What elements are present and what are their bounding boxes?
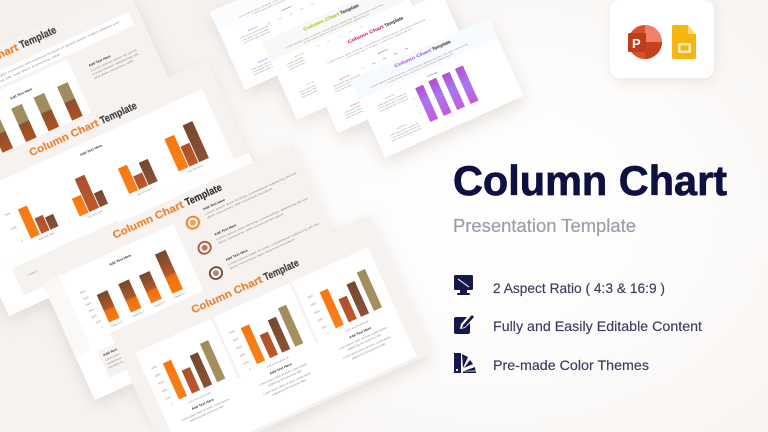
purple column chart: 200 bbox=[419, 112, 422, 114]
chart card 3: 3000 bbox=[313, 309, 321, 315]
slide D title: Template bbox=[262, 257, 301, 283]
purple slide title: Template bbox=[431, 39, 452, 52]
slide: green theme template: Lorem ipsum dolor sit amet, consectetuer adipiscing elit bbox=[303, 12, 371, 44]
slide B: clustered columns: Add Text Here bbox=[38, 231, 55, 241]
slide C: stacked orange columns with icon list: Category 1 bbox=[110, 319, 124, 328]
slide: green theme template: Column Chart bbox=[302, 11, 341, 32]
feature: color themes bbox=[454, 353, 649, 373]
blue category labels: Cate bbox=[267, 21, 271, 26]
chart card 3: ● A1 ● A2 ● A3 ● A4 bbox=[345, 319, 369, 333]
purple side text bottom: Lorem ipsum dolor sit amet elit bbox=[390, 124, 421, 140]
slide C: stacked orange columns with icon list: 2000 bbox=[90, 313, 98, 319]
slide D title bbox=[190, 257, 301, 316]
blue category labels: Cate bbox=[299, 7, 304, 11]
slide: green theme template: Lorem ipsum dolor sit amet elit bbox=[288, 56, 317, 71]
purple side text top: Lorem ipsum dolor sit amet elit bbox=[379, 97, 410, 113]
pink category labels: Cate bbox=[393, 52, 398, 56]
purple side text bottom: Add Text Here bbox=[396, 123, 407, 130]
slide: purple theme template: Add Text Here bbox=[427, 71, 438, 78]
green category labels: Cate bbox=[326, 39, 331, 43]
slide B: clustered columns: Add Text Here bbox=[136, 186, 154, 197]
icon list: diem nonummy nibh euismod tincidunt bbox=[206, 187, 273, 220]
icon list: Lorem ipsum dolor sit amet, consectetuer adipiscing elit sed bbox=[216, 196, 309, 241]
purple slide title bbox=[393, 39, 452, 69]
slide: pink theme template: Add Text Here bbox=[349, 100, 360, 108]
slide A: stacked olive columns: consectetuer adipiscing elit bbox=[92, 52, 139, 76]
chart card 2: 2000 bbox=[239, 352, 246, 358]
chart card 1: 2000 bbox=[161, 387, 168, 393]
purple side text top: Add Text Here bbox=[384, 93, 395, 100]
slide: blue theme template: Lorem ipsum dolor sit amet elit bbox=[241, 27, 270, 42]
feature: editable: Fully and Easily Editable Content bbox=[493, 318, 702, 334]
slide C: stacked orange columns with icon list: 0 bbox=[101, 325, 104, 329]
slide: blue theme template: Lorem ipsum dolor sit amet elit bbox=[242, 30, 271, 45]
chart card 2: ● A1 ● A2 ● A3 ● A4 bbox=[266, 355, 290, 369]
chart card 1: 1000 bbox=[164, 395, 172, 401]
green category labels: Cate bbox=[359, 25, 364, 29]
chart card 2: 3000 bbox=[235, 344, 243, 350]
chart card 2: 0 bbox=[249, 367, 252, 371]
slide: pink theme template: Lorem ipsum dolor sit amet elit bbox=[343, 100, 372, 115]
shadows behind slides bbox=[0, 0, 525, 430]
blue category labels bbox=[267, 2, 315, 26]
slide C: stacked orange columns with icon list: 3000 bbox=[85, 301, 92, 307]
pink category labels bbox=[361, 47, 409, 70]
slide: pink theme template: Lorem ipsum dolor sit amet elit bbox=[344, 102, 373, 117]
chart card 3: 2000 bbox=[317, 316, 324, 322]
slide: blue theme template: Lorem ipsum dolor sit amet elit bbox=[251, 56, 280, 71]
slide C: stacked orange columns with icon list: Column Chart bbox=[111, 199, 186, 241]
pink category labels: Cate bbox=[361, 66, 365, 70]
purple side text top: Lorem ipsum dolor sit amet elit bbox=[377, 92, 407, 108]
feature: editable bbox=[454, 315, 702, 334]
chart card 1: 5000 bbox=[151, 364, 158, 370]
blue category labels: Cate bbox=[289, 12, 293, 16]
chart card 1: ● A1 ● A2 ● A3 ● A4 bbox=[188, 390, 212, 404]
slide B: clustered columns: 2000 bbox=[10, 225, 18, 231]
feature: aspect ratio bbox=[454, 275, 665, 296]
purple column chart: 500 bbox=[413, 98, 416, 101]
icon list: Add Text Here bbox=[202, 198, 226, 211]
slide B: clustered columns: Column Chart bbox=[28, 117, 101, 159]
chart card 2: Lorem ipsum dolor sit amet, consectetuer bbox=[263, 371, 312, 396]
slide: green theme template: Lorem ipsum dolor sit amet elit bbox=[300, 81, 328, 96]
slide: blue theme template bbox=[210, 0, 384, 90]
slide D: three chart cards bbox=[110, 215, 432, 432]
slide: blue theme template: Add Text Here bbox=[281, 5, 292, 12]
chart card 1: 4000 bbox=[154, 372, 162, 378]
chart card 3: Add Text Here bbox=[349, 326, 372, 339]
slide B: clustered columns: 3000 bbox=[4, 211, 12, 217]
slide D title: Column Chart bbox=[190, 274, 265, 316]
icon: edit pencil bbox=[454, 315, 474, 334]
subtitle: Presentation Template bbox=[453, 216, 636, 236]
slide C: stacked orange columns with icon list: Template bbox=[183, 182, 224, 209]
chart card 1: adipiscing elit nonummy nibh bbox=[189, 404, 225, 423]
slide: green theme template: Lorem ipsum dolor sit amet elit bbox=[287, 54, 316, 69]
slide: blue theme template: Lorem ipsum dolor sit amet elit bbox=[240, 25, 269, 40]
icon: colour fan bbox=[454, 353, 476, 373]
slide: pink theme template: Lorem ipsum dolor sit amet, consectetuer adipiscing elit bbox=[345, 27, 413, 59]
chart card 3: 5000 bbox=[307, 293, 314, 299]
chart card 1: 3000 bbox=[157, 379, 165, 386]
slide: purple theme template bbox=[350, 18, 524, 158]
chart card 2: adipiscing elit nonummy nibh bbox=[267, 369, 303, 387]
chart card 2: 4000 bbox=[232, 336, 240, 343]
slide: pink theme template: Lorem ipsum dolor sit amet elit bbox=[335, 78, 363, 93]
chart card 3: Lorem ipsum dolor sit amet, consectetuer bbox=[338, 326, 387, 351]
purple side text bottom: Lorem ipsum dolor sit amet elit bbox=[391, 127, 422, 143]
blue category labels: Cate bbox=[278, 17, 282, 21]
purple side text top: Lorem ipsum dolor sit amet elit bbox=[378, 94, 408, 110]
chart card 2: Add Text Here bbox=[269, 362, 292, 376]
slide: green theme template: Lorem ipsum dolor sit amet elit bbox=[286, 51, 315, 66]
green category labels: Cate bbox=[337, 34, 342, 38]
chart card 3 bbox=[292, 247, 407, 370]
chart card 2: 5000 bbox=[229, 329, 236, 335]
slide: pink theme template: Column Chart bbox=[347, 24, 385, 44]
purple column chart: 300 bbox=[416, 105, 419, 107]
slide B: clustered columns: Add Text Here bbox=[187, 163, 204, 174]
slide A: stacked olive columns bbox=[0, 0, 189, 243]
slide C: stacked orange columns with icon list: 2500 bbox=[88, 307, 95, 313]
purple side text top bbox=[375, 88, 410, 113]
slide C: stacked orange columns with icon list: 4000 bbox=[82, 295, 90, 301]
slide A: stacked olive columns: Add Text Here bbox=[9, 87, 33, 101]
chart card 1 bbox=[136, 318, 247, 432]
title: Column Chart bbox=[453, 157, 727, 204]
app icons card bbox=[610, 0, 716, 82]
slide: blue theme template: Add Text Here bbox=[257, 57, 269, 64]
slide C: stacked orange columns with icon list: Add Text Here bbox=[109, 253, 132, 267]
slide A: stacked olive columns: Add Text Here bbox=[88, 54, 111, 68]
slide: green theme template: Template bbox=[339, 3, 360, 15]
icon list: Lorem ipsum dolor sit amet, consectetuer adipiscing elit sed bbox=[204, 171, 298, 216]
chart card 3: Lorem ipsum dolor sit amet, consectetuer bbox=[342, 335, 391, 360]
chart card 3: 0 bbox=[327, 331, 330, 336]
slide: green theme template: Lorem ipsum dolor sit amet, consectetuer adipiscing elit, sed diem nonummy bbox=[285, 3, 384, 49]
feature: color themes: Pre-made Color Themes bbox=[493, 357, 649, 373]
slide B: clustered columns: Add Text Here bbox=[79, 144, 103, 157]
feature: aspect ratio: 2 Aspect Ratio ( 4:3 & 16:9 ) bbox=[493, 280, 665, 296]
slide B: clustered columns: Lorem ipsum dolor sit amet bbox=[27, 259, 60, 277]
chart card 2: adipiscing elit nonummy nibh bbox=[271, 378, 307, 397]
slide: green theme template bbox=[262, 0, 436, 120]
slide: pink theme template: Template bbox=[384, 15, 404, 28]
purple side text bottom: Lorem ipsum dolor sit amet elit bbox=[389, 122, 420, 137]
chart card 2 bbox=[214, 283, 329, 406]
slide C: stacked orange columns with icon list bbox=[33, 144, 355, 400]
chart card 3: adipiscing elit nonummy nibh bbox=[351, 342, 386, 360]
purple slide title: Column Chart bbox=[393, 47, 432, 69]
icon: PowerPoint: P bbox=[632, 36, 641, 51]
slide: blue theme template: Lorem ipsum dolor sit amet elit bbox=[253, 61, 282, 76]
icon list: Add Text Here bbox=[225, 248, 248, 262]
slide B: clustered columns: Template bbox=[98, 100, 139, 127]
icon list: Add Text Here bbox=[214, 223, 237, 237]
slide: pink theme template: Add Text Here bbox=[339, 74, 350, 81]
slide C: stacked orange columns with icon list: Category 4 bbox=[173, 290, 187, 299]
slide B: clustered columns: Add Text Here bbox=[87, 208, 104, 219]
pink category labels: Cate bbox=[372, 61, 376, 65]
pink category labels: Cate bbox=[404, 47, 409, 51]
slide C: stacked orange columns with icon list: consectetuer elit bbox=[106, 353, 127, 366]
icon list: Lorem ipsum dolor sit amet, consectetuer adipiscing elit sed bbox=[227, 221, 320, 267]
slide A: stacked olive columns: Lorem ipsum dolor sit amet bbox=[90, 48, 137, 72]
icon list bbox=[181, 166, 324, 284]
slide: pink theme template: Lorem ipsum dolor sit amet elit bbox=[332, 73, 361, 88]
green category labels: Cate bbox=[348, 29, 353, 34]
purple column chart bbox=[409, 65, 479, 126]
slide: pink theme template: Lorem ipsum dolor sit amet elit bbox=[345, 105, 374, 120]
chart card 3: adipiscing elit nonummy nibh bbox=[347, 332, 382, 351]
slide C: stacked orange columns with icon list: 5000 bbox=[79, 289, 87, 295]
green category labels: Cate bbox=[316, 44, 320, 48]
slide: green theme template: Lorem ipsum dolor sit amet elit bbox=[299, 79, 327, 94]
icon: Google Slides bbox=[672, 25, 696, 59]
slide: purple theme template: Lorem ipsum dolor sit amet, consectetuer adipiscing elit, sed diem nonummy bbox=[369, 42, 469, 89]
chart card 2: 1000 bbox=[242, 359, 250, 366]
icon list: diem nonummy nibh euismod tincidunt bbox=[229, 237, 296, 270]
slide: blue theme template: Add Text Here bbox=[247, 25, 259, 32]
slide: pink theme template: Lorem ipsum dolor sit amet, consectetuer adipiscing elit, sed diem nonummy bbox=[327, 18, 426, 65]
slide C: stacked orange columns with icon list: Add Text Here bbox=[103, 344, 126, 357]
slide A: stacked olive columns: sed diem nonummy nibh bbox=[93, 58, 135, 80]
chart card 3: 4000 bbox=[310, 301, 318, 307]
slide: green theme template: Lorem ipsum dolor sit amet elit bbox=[301, 84, 330, 99]
icon list: diem nonummy nibh euismod tincidunt bbox=[217, 212, 284, 245]
blue category labels: Cate bbox=[310, 2, 315, 6]
chart card 2: Lorem ipsum dolor sit amet, consectetuer bbox=[258, 362, 308, 387]
slide: pink theme template bbox=[303, 0, 477, 133]
slide A: stacked olive columns: Template bbox=[18, 24, 58, 51]
purple column chart: 0 bbox=[425, 123, 426, 125]
chart card 1: Lorem ipsum dolor sit amet, consectetuer bbox=[180, 397, 230, 422]
slide C: stacked orange columns with icon list: sed diem nonummy bbox=[108, 355, 133, 370]
slide: pink theme template: Add Text Here bbox=[377, 48, 388, 55]
slide: purple theme template: Lorem ipsum dolor sit amet, consectetuer adipiscing elit bbox=[387, 52, 454, 84]
slide: blue theme template: Lorem ipsum dolor sit amet elit bbox=[252, 59, 281, 74]
green category labels bbox=[316, 25, 364, 48]
slide C: stacked orange columns with icon list: Category 2 bbox=[132, 309, 146, 318]
chart card 3: 1000 bbox=[320, 324, 328, 330]
slide B: clustered columns bbox=[0, 60, 269, 316]
slide C: stacked orange columns with icon list: 1000 bbox=[95, 319, 102, 325]
slide: green theme template: Add Text Here bbox=[305, 80, 316, 87]
chart card 1: 0 bbox=[171, 402, 174, 406]
slide B: clustered columns: 0 bbox=[20, 238, 24, 243]
slide: green theme template: Add Text Here bbox=[294, 51, 305, 59]
slide: pink theme template: Lorem ipsum dolor sit amet elit bbox=[333, 76, 362, 91]
purple side text bottom bbox=[388, 118, 422, 143]
chart card 1: Add Text Here bbox=[191, 398, 214, 411]
slide C: stacked orange columns with icon list: Lorem ipsum dolor bbox=[105, 349, 128, 362]
icon: monitor bbox=[454, 275, 473, 295]
pink category labels: Cate bbox=[382, 56, 387, 61]
slide C: stacked orange columns with icon list: Category 3 bbox=[153, 299, 167, 309]
